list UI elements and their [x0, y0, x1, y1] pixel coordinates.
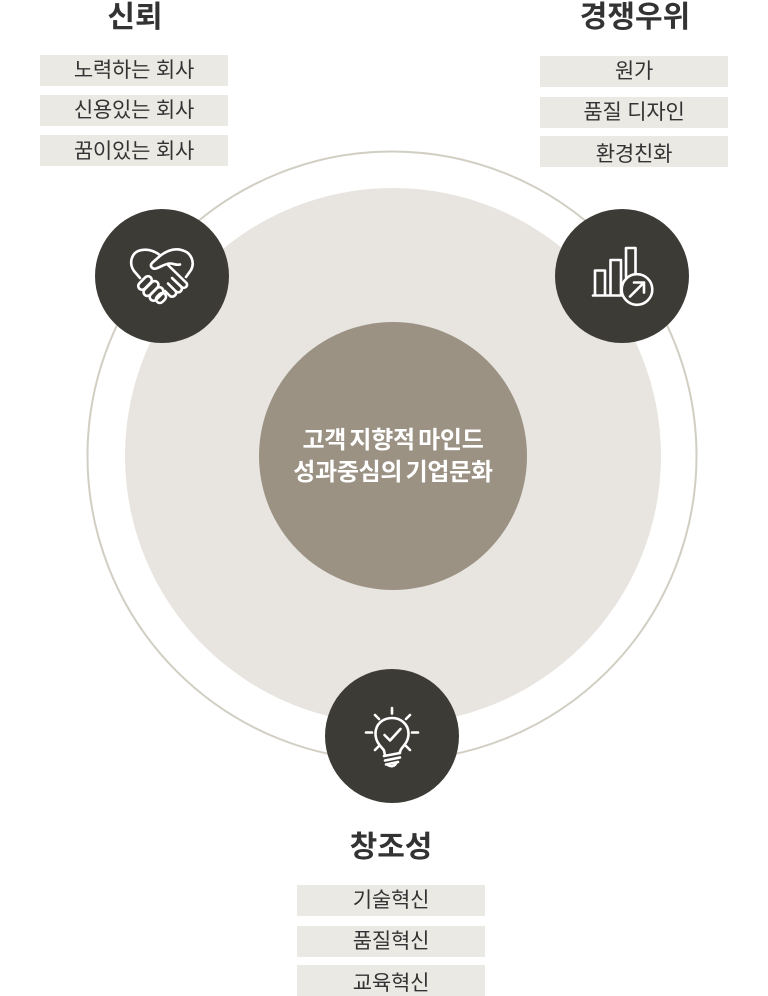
- item: 교육혁신: 교육혁신: [353, 972, 429, 995]
- item: 꿈이있는 회사: 꿈이있는 회사: [74, 140, 194, 163]
- item: 꿈이있는 회사: [40, 135, 228, 166]
- center text: 성과중심의 기업문화: [293, 459, 493, 486]
- icon: growth chart badge: [555, 209, 689, 343]
- item: 품질 디자인: [540, 97, 728, 128]
- item: 노력하는 회사: 노력하는 회사: [74, 59, 194, 82]
- heading: 창조성: 창조성: [350, 831, 432, 864]
- item: 품질혁신: 품질혁신: [353, 930, 429, 953]
- center text: 고객 지향적 마인드: [302, 427, 483, 454]
- item: 환경친화: [540, 136, 728, 167]
- item: 환경친화: 환경친화: [596, 143, 672, 166]
- heading: 경쟁우위: 경쟁우위: [580, 1, 690, 34]
- item: 신용있는 회사: [40, 95, 228, 126]
- large background circle: [125, 188, 661, 724]
- center text: [293, 427, 493, 486]
- center circle: [259, 322, 527, 590]
- panel: 창조성: [297, 831, 485, 996]
- item: 원가: 원가: [615, 60, 653, 83]
- item: 노력하는 회사: [40, 55, 228, 86]
- item: 기술혁신: [297, 885, 485, 916]
- item: 신용있는 회사: 신용있는 회사: [74, 99, 194, 122]
- icon: light bulb badge: [325, 669, 459, 803]
- panel: 경쟁우위: [540, 1, 728, 167]
- panel: 신뢰: [40, 1, 228, 166]
- icon: handshake badge: [95, 209, 229, 343]
- item: 기술혁신: 기술혁신: [353, 889, 429, 912]
- item: 교육혁신: [297, 965, 485, 996]
- outer ring: [88, 152, 696, 760]
- item: 원가: [540, 56, 728, 87]
- item: 품질 디자인: 품질 디자인: [583, 101, 685, 124]
- item: 품질혁신: [297, 926, 485, 957]
- heading: 신뢰: 신뢰: [107, 1, 163, 34]
